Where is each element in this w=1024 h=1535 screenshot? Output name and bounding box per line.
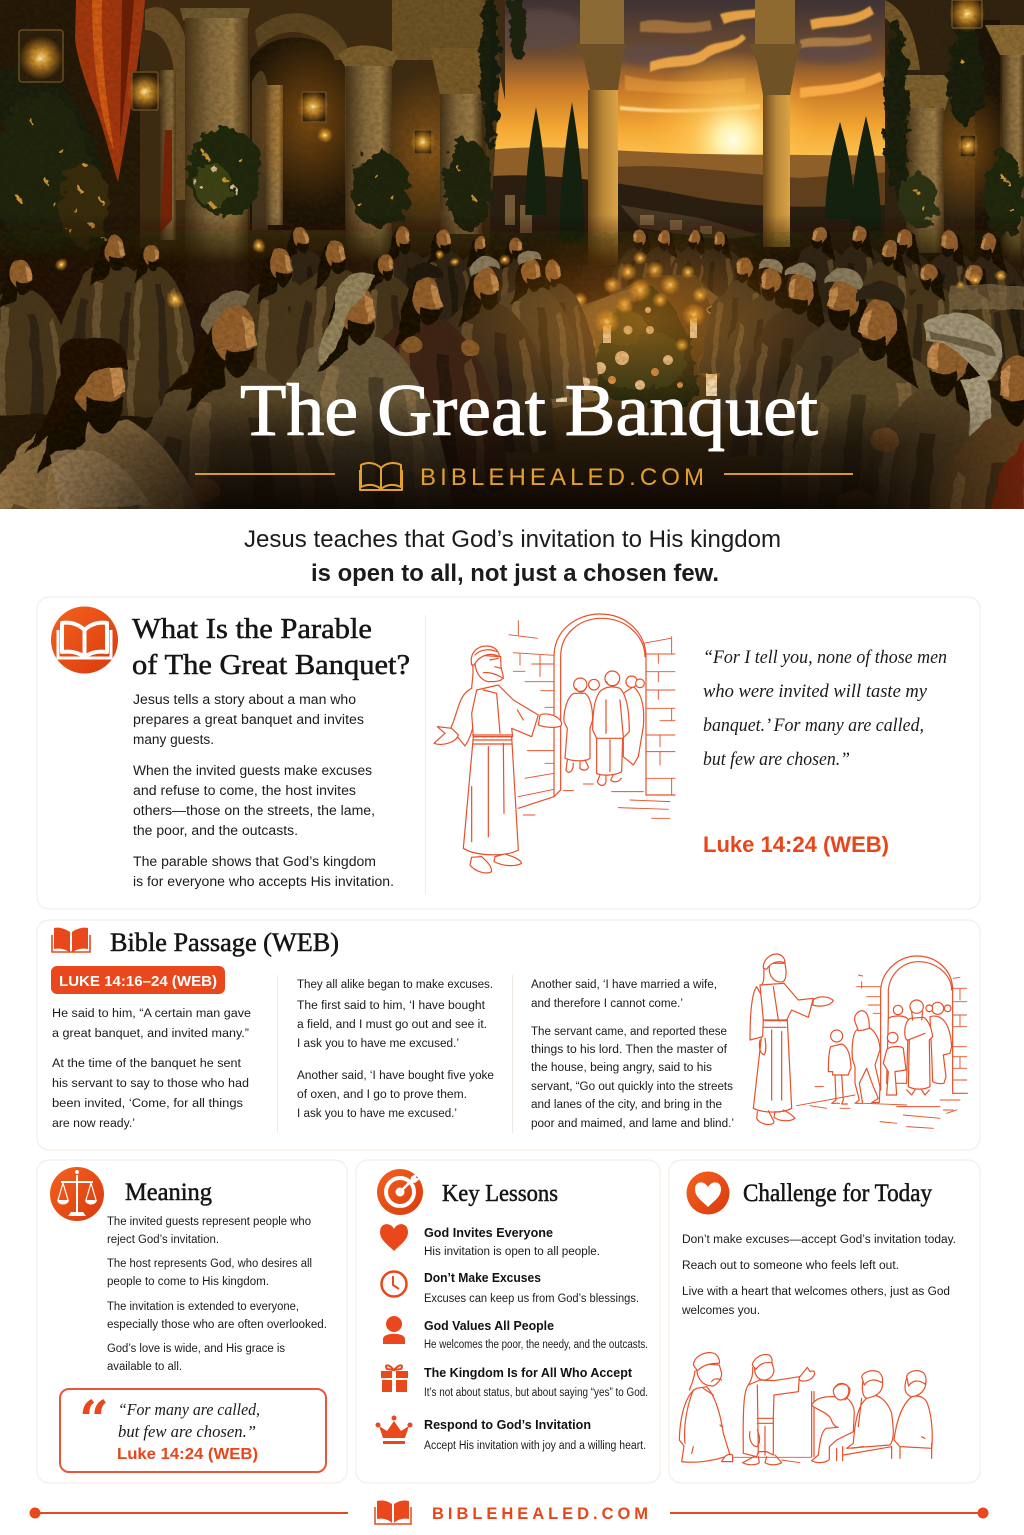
challenge text bbox=[681, 1234, 956, 1317]
panel: key lessons bbox=[356, 1160, 660, 1483]
paint texture, left bbox=[0, 0, 490, 509]
passage column 3: Another said, ‘I have married a wife, bbox=[531, 979, 717, 991]
lesson: kingdom for all: It’s not about status, but about saying “yes” to God. bbox=[424, 1387, 648, 1399]
parable text bbox=[133, 692, 394, 889]
hero brand line: BIBLEHEALED.COM bbox=[420, 464, 704, 491]
parable heading bbox=[132, 613, 410, 681]
passage column 2: I ask you to have me excused.’ bbox=[297, 1038, 459, 1050]
icon: heart in orange circle bbox=[686, 1172, 730, 1214]
passage column 1: He said to him, “A certain man gave bbox=[52, 1008, 251, 1020]
panel: bible passage bbox=[37, 920, 980, 1150]
passage heading: Bible Passage (WEB) bbox=[110, 928, 339, 957]
seated guests, left side bbox=[0, 250, 598, 509]
lesson: god invites everyone bbox=[380, 1224, 600, 1258]
arcade wall, right bbox=[885, 0, 1024, 232]
panel: what is the parable bbox=[37, 597, 980, 909]
passage column 3: poor and maimed, and lame and blind.’ bbox=[531, 1118, 734, 1130]
passage column 3: things to his lord. Then the master of bbox=[531, 1044, 728, 1056]
lesson: respond to invitation: Accept His invitation with joy and a willing heart. bbox=[424, 1440, 646, 1452]
lesson: kingdom for all bbox=[381, 1365, 648, 1399]
parable text: Jesus tells a story about a man who bbox=[133, 692, 356, 707]
hanging foliage bbox=[0, 0, 1024, 262]
parable text: and refuse to come, the host invites bbox=[133, 783, 356, 798]
cypress trees bbox=[525, 102, 882, 244]
lesson: god values all people: He welcomes the poor, the needy, and the outcasts. bbox=[424, 1339, 648, 1351]
icon: scales in orange circle bbox=[50, 1167, 104, 1221]
meaning text: available to all. bbox=[107, 1361, 182, 1373]
scripture quote: banquet.’ For many are called, bbox=[703, 715, 924, 736]
challenge text: Reach out to someone who feels left out. bbox=[682, 1260, 899, 1272]
footer: BIBLEHEALED.COM bbox=[432, 1505, 648, 1523]
passage badge: LUKE 14:16–24 (WEB) bbox=[59, 974, 217, 990]
meaning text: especially those who are often overlooked. bbox=[107, 1319, 327, 1331]
passage badge bbox=[51, 966, 225, 994]
meaning text: The invitation is extended to everyone, bbox=[107, 1301, 299, 1313]
lesson: kingdom for all: The Kingdom Is for All Who Accept bbox=[424, 1366, 633, 1380]
challenge text: Live with a heart that welcomes others, just as God bbox=[682, 1286, 950, 1298]
red curtain bbox=[75, 0, 172, 232]
callout: quote box: but few are chosen.” bbox=[118, 1422, 256, 1441]
intro statement: is open to all, not just a chosen few. bbox=[311, 560, 719, 587]
passage column 1: his servant to say to those who had bbox=[52, 1078, 249, 1090]
icon: footer book bbox=[375, 1500, 411, 1524]
passage column 3: and therefore I cannot come.’ bbox=[531, 998, 683, 1010]
parable text: When the invited guests make excuses bbox=[133, 763, 372, 778]
illustration: master sending for the poor bbox=[750, 954, 967, 1128]
sky at sunset bbox=[495, 0, 885, 156]
panel: challenge for today bbox=[669, 1160, 980, 1483]
dark title gradient bbox=[0, 400, 1024, 510]
passage column 2: of oxen, and I go to prove them. bbox=[297, 1089, 467, 1101]
passage column 1: a great banquet, and invited many.” bbox=[52, 1028, 249, 1040]
parable text: prepares a great banquet and invites bbox=[133, 712, 364, 727]
lesson: god values all people: God Values All People bbox=[424, 1319, 554, 1333]
key lessons heading: Key Lessons bbox=[442, 1181, 558, 1207]
sunlit stone columns bbox=[574, 0, 802, 278]
lesson: god values all people bbox=[383, 1316, 648, 1351]
callout: quote box: “For many are called, bbox=[118, 1400, 260, 1419]
icon: target in orange circle bbox=[377, 1169, 423, 1215]
meaning text: God’s love is wide, and His grace is bbox=[107, 1343, 285, 1355]
parable text: many guests. bbox=[133, 732, 214, 747]
lesson: don't make excuses: Excuses can keep us from God’s blessings. bbox=[424, 1293, 639, 1305]
passage column 1 bbox=[52, 1008, 251, 1130]
scripture quote: but few are chosen.” bbox=[703, 749, 850, 770]
passage column 3: and lanes of the city, and bring in the bbox=[531, 1099, 722, 1111]
passage column 2: a field, and I must go out and see it. bbox=[297, 1019, 487, 1031]
panel: meaning bbox=[37, 1160, 347, 1483]
lesson: don't make excuses: Don’t Make Excuses bbox=[424, 1271, 541, 1285]
footer bbox=[30, 1500, 988, 1524]
passage column 3: the house, being angry, said to his bbox=[531, 1062, 712, 1074]
passage column 2: I ask you to have me excused.’ bbox=[297, 1108, 457, 1120]
lesson: don't make excuses bbox=[382, 1271, 639, 1305]
challenge heading: Challenge for Today bbox=[743, 1180, 932, 1207]
meaning text: reject God’s invitation. bbox=[107, 1234, 219, 1246]
warm candle wash over table bbox=[466, 238, 814, 402]
icon: orange book bbox=[52, 928, 90, 953]
lesson: god invites everyone: His invitation is open to all people. bbox=[424, 1246, 600, 1258]
passage column 3: The servant came, and reported these bbox=[531, 1026, 727, 1038]
lesson: respond to invitation: Respond to God’s Invitation bbox=[424, 1418, 591, 1432]
parable heading: What Is the Parable bbox=[132, 613, 372, 645]
parable heading: of The Great Banquet? bbox=[132, 649, 410, 681]
lesson: respond to invitation bbox=[376, 1416, 646, 1452]
large marble columns bbox=[180, 8, 1024, 303]
passage column 2 bbox=[297, 979, 494, 1120]
scripture reference: Luke 14:24 (WEB) bbox=[703, 832, 889, 857]
lanterns bbox=[19, 0, 985, 157]
meaning text: The host represents God, who desires all bbox=[107, 1258, 312, 1270]
passage column 2: Another said, ‘I have bought five yoke bbox=[297, 1070, 494, 1082]
paint texture, lower bbox=[490, 232, 885, 440]
scripture quote bbox=[703, 647, 947, 770]
icon: gold open book bbox=[360, 463, 402, 490]
scripture quote: who were invited will taste my bbox=[703, 681, 928, 702]
hero title: The Great Banquet bbox=[240, 370, 818, 452]
challenge text: Don’t make excuses—accept God’s invitation today. bbox=[682, 1234, 956, 1246]
intro statement: Jesus teaches that God’s invitation to His kingdom bbox=[244, 526, 781, 553]
illustration: host at the open door bbox=[434, 614, 675, 873]
passage column 1: At the time of the banquet he sent bbox=[52, 1058, 242, 1070]
meaning text: people to come to His kingdom. bbox=[107, 1276, 269, 1288]
parable text: is for everyone who accepts His invitation. bbox=[133, 874, 394, 889]
illustration: group conversation bbox=[679, 1353, 932, 1465]
intro statement bbox=[244, 526, 781, 587]
meaning heading: Meaning bbox=[125, 1179, 212, 1206]
passage column 1: been invited, ‘Come, for all things bbox=[52, 1098, 243, 1110]
callout: quote box: “ bbox=[79, 1390, 109, 1451]
challenge text: welcomes you. bbox=[681, 1305, 760, 1317]
passage column 2: The first said to him, ‘I have bought bbox=[297, 1000, 486, 1012]
passage column 2: They all alike began to make excuses. bbox=[297, 979, 493, 991]
passage column 3 bbox=[531, 979, 734, 1130]
arcade wall and arches, left bbox=[140, 0, 505, 260]
parable text: others—those on the streets, the lame, bbox=[133, 803, 375, 818]
background crowd bbox=[0, 215, 1024, 416]
banquet table with flowers and candles bbox=[505, 252, 762, 484]
parable text: the poor, and the outcasts. bbox=[133, 823, 298, 838]
seated guests, right side bbox=[698, 256, 1024, 509]
callout: quote box bbox=[60, 1389, 326, 1472]
passage column 1: are now ready.’ bbox=[52, 1118, 135, 1130]
meaning text bbox=[107, 1216, 327, 1373]
passage column 3: servant, “Go out quickly into the streets bbox=[531, 1081, 733, 1093]
paint texture, right bbox=[885, 0, 1024, 509]
hero image: banquet scene bbox=[0, 0, 1024, 509]
parable text: The parable shows that God’s kingdom bbox=[133, 854, 376, 869]
distant hills and town bbox=[494, 147, 885, 239]
lesson: god invites everyone: God Invites Everyone bbox=[424, 1226, 553, 1240]
icon: book in orange circle bbox=[51, 606, 118, 674]
scripture quote: “For I tell you, none of those men bbox=[703, 647, 947, 668]
callout: quote box: Luke 14:24 (WEB) bbox=[117, 1446, 258, 1463]
hero brand line bbox=[195, 463, 853, 491]
meaning text: The invited guests represent people who bbox=[107, 1216, 311, 1228]
